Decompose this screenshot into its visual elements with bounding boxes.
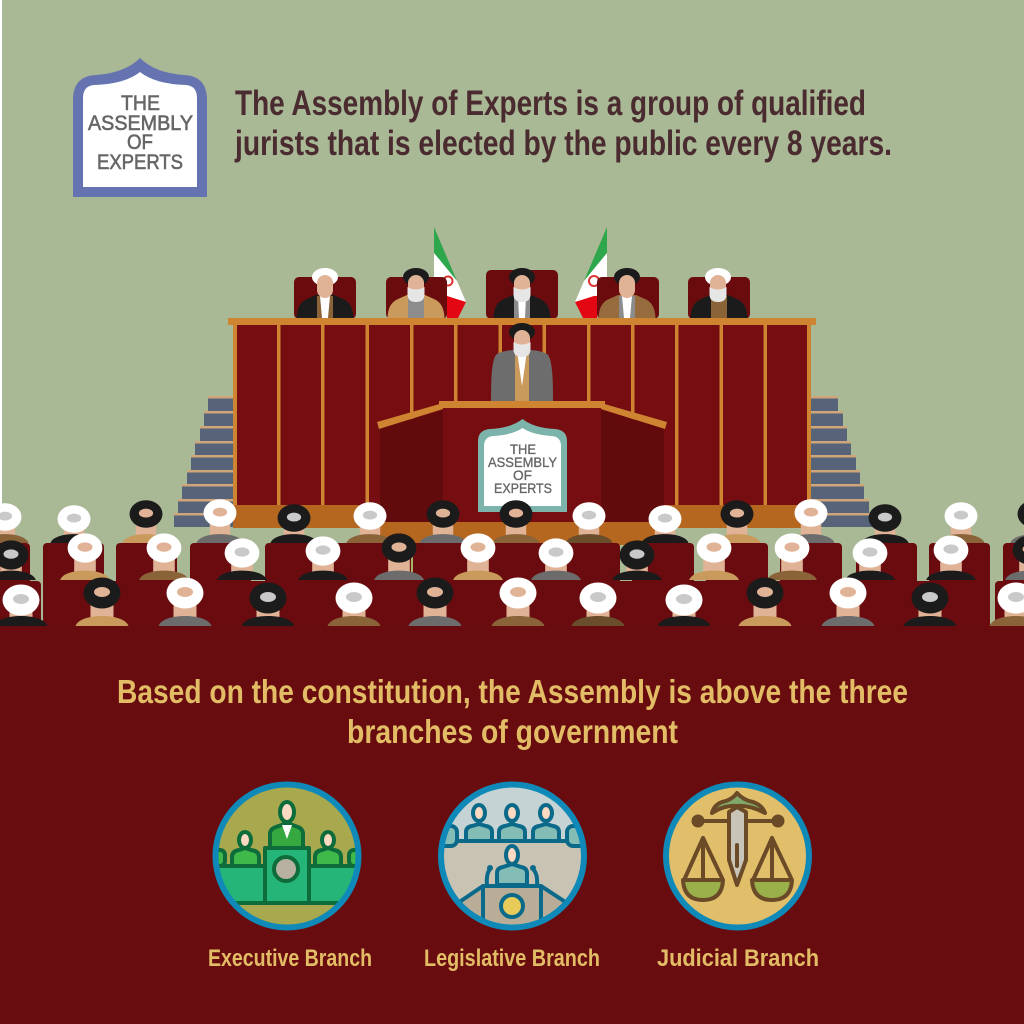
podium sign: ASSEMBLY	[488, 454, 558, 470]
heading: assembly description	[234, 84, 892, 163]
heading: constitution statement: branches of government	[347, 713, 678, 750]
logo: The Assembly of Experts badge: EXPERTS	[97, 151, 183, 174]
logo: The Assembly of Experts badge: THE	[121, 92, 160, 115]
label: judicial branch: Judicial Branch	[657, 945, 819, 972]
stairs: right	[811, 396, 873, 527]
label: executive branch: Executive Branch	[208, 945, 372, 972]
icon: judicial branch	[666, 784, 809, 928]
heading: assembly description: The Assembly of Experts is a group of qualified	[235, 84, 866, 123]
audience: middle row seats	[0, 543, 1024, 588]
podium sign: OF	[513, 467, 532, 483]
flag: left	[434, 227, 466, 318]
podium sign: THE	[510, 441, 536, 457]
chair 1 with jurist	[294, 268, 356, 319]
chair 3 with jurist	[486, 268, 558, 319]
flag: right	[575, 227, 607, 318]
logo: The Assembly of Experts badge: ASSEMBLY	[88, 112, 193, 135]
logo: The Assembly of Experts badge: OF	[127, 131, 153, 154]
audience: back row	[0, 499, 1024, 543]
chair 4 with jurist	[597, 268, 659, 319]
icon: executive branch	[205, 784, 370, 928]
audience: middle row	[0, 533, 1024, 580]
audience: front row	[0, 578, 1024, 626]
podium	[377, 401, 667, 522]
logo: The Assembly of Experts badge	[73, 58, 207, 197]
chair 5 with jurist	[688, 268, 750, 319]
heading: constitution statement: Based on the constitution, the Assembly is above the three	[117, 673, 908, 710]
stairs: left	[174, 396, 234, 527]
podium sign: EXPERTS	[494, 480, 552, 496]
panel: bottom maroon section	[0, 626, 1024, 1024]
heading: constitution statement	[117, 673, 908, 750]
icon: legislative branch	[438, 782, 587, 930]
panel: presiding board seated at the dais	[294, 268, 750, 319]
chair 2 with jurist	[386, 268, 447, 319]
speaker at the podium	[491, 323, 553, 401]
label: legislative branch: Legislative Branch	[424, 945, 600, 972]
panel: dais wall with posts	[228, 318, 816, 545]
audience: front row seats	[0, 581, 1024, 631]
podium sign	[478, 419, 567, 512]
